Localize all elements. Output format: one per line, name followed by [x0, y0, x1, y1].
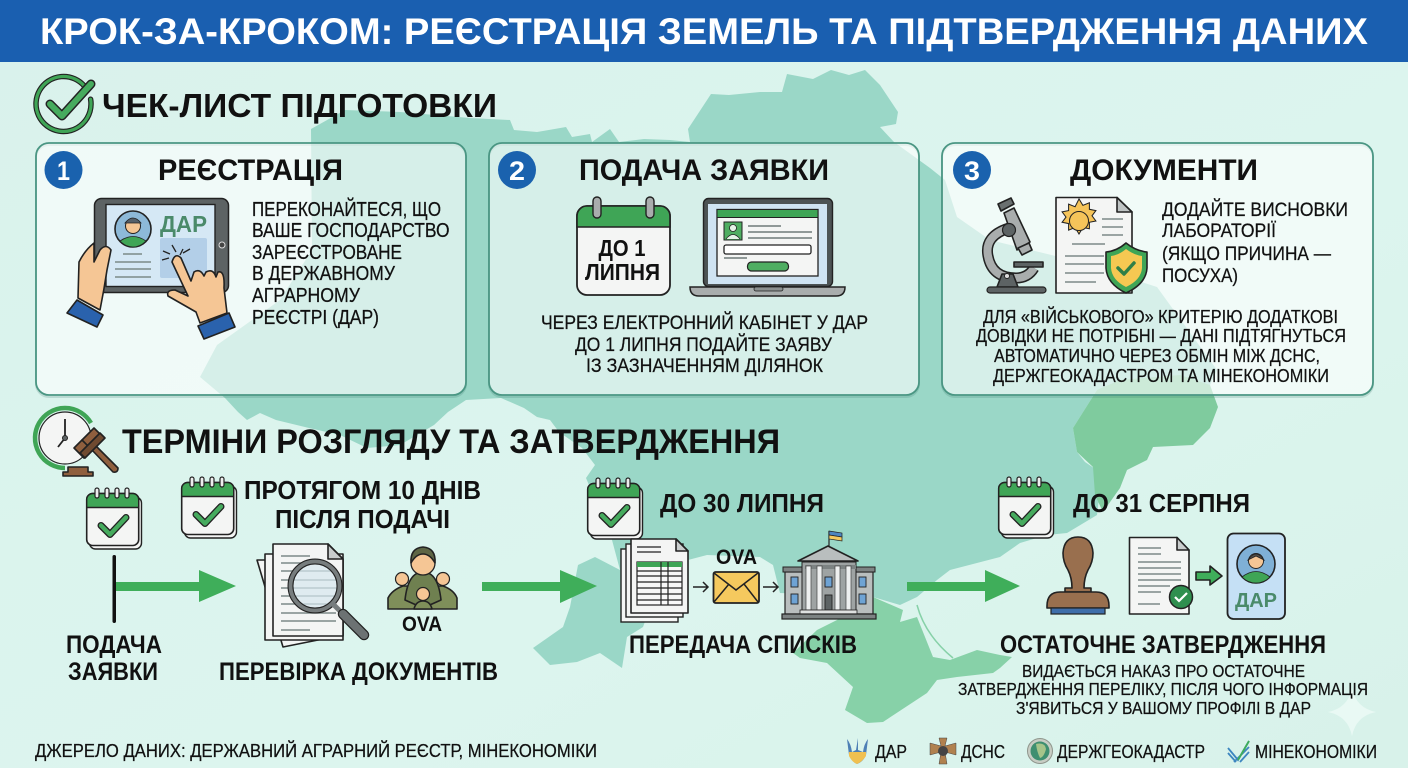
label: OVA: OVA: [402, 613, 442, 636]
icon: lab report with sun and shield: [1056, 198, 1147, 293]
text: military criterion note: ДОВІДКИ НЕ ПОТРІБНІ — ДАНІ ПІДТЯГНУТЬСЯ: [976, 326, 1346, 346]
icon: calendar until 1 July: [577, 197, 670, 295]
arrow 2: [482, 570, 597, 603]
icon: calendar: [182, 477, 236, 538]
number badge 2: 2: [509, 156, 525, 186]
text: military criterion note: ДЛЯ «ВІЙСЬКОВОГО» КРИТЕРІЮ ДОДАТКОВІ: [983, 306, 1338, 327]
icon: tablet with hands: [67, 198, 235, 339]
step: document check: [182, 475, 498, 686]
icon: microscope: [987, 198, 1046, 293]
title bar: [0, 0, 1408, 62]
icon: documents with magnifier: [257, 544, 364, 647]
icon: stamp: [1047, 537, 1109, 614]
footer: source: ДЖЕРЕЛО ДАНИХ: ДЕРЖАВНИЙ АГРАРНИЙ РЕЄСТР, МІНЕКОНОМІКИ: [35, 740, 597, 761]
icon: checklist check mark: [36, 76, 91, 131]
text: lab conclusions: ПОСУХА): [1162, 265, 1238, 287]
text: application description: ЧЕРЕЗ ЕЛЕКТРОННИЙ КАБІНЕТ У ДАР: [541, 310, 868, 334]
panel: application: [489, 143, 919, 397]
arrow 3: [907, 570, 1020, 602]
text: application description: ІЗ ЗАЗНАЧЕННЯМ ДІЛЯНОК: [586, 355, 824, 377]
step: application submission: [66, 488, 162, 686]
number badge 1: 1: [57, 156, 70, 186]
heading: review terms: ТЕРМІНИ РОЗГЛЯДУ ТА ЗАТВЕРДЖЕННЯ: [122, 423, 780, 461]
label: OVA: OVA: [716, 546, 757, 569]
label: application: ЗАЯВКИ: [68, 658, 158, 686]
footer: logo DAR: ДАР: [875, 741, 907, 762]
title bar: КРОК-ЗА-КРОКОМ: РЕЄСТРАЦІЯ ЗЕМЕЛЬ ТА ПІДТВЕРДЖЕННЯ ДАНИХ: [40, 11, 1368, 52]
icon: calendar: [588, 478, 642, 539]
icon: calendar until 1 July: ЛИПНЯ: [585, 259, 660, 285]
icon: DAR profile card: [1228, 534, 1285, 619]
icon: calendar: [87, 488, 142, 549]
date label: until 30 July: ДО 30 ЛИПНЯ: [660, 488, 824, 518]
number badge 1: [44, 151, 82, 189]
text: registration description: ЗАРЕЄСТРОВАНЕ: [252, 242, 402, 264]
text: final approval description: [958, 661, 1368, 718]
icon: government building: [782, 531, 876, 619]
text: lab conclusions: [1162, 197, 1348, 287]
heading: registration: РЕЄСТРАЦІЯ: [158, 154, 343, 187]
icon: approval document: [1130, 538, 1192, 614]
arrow: envelope to ministry: [763, 582, 778, 592]
arrow 1: [116, 570, 236, 602]
footer: logo DSNS: [930, 738, 1005, 764]
label: application: [66, 631, 162, 686]
text: final approval description: ВИДАЄТЬСЯ НАКАЗ ПРО ОСТАТОЧНЕ: [1022, 661, 1305, 681]
label: final approval: ОСТАТОЧНЕ ЗАТВЕРДЖЕННЯ: [1000, 631, 1326, 659]
icon: tablet with hands: ДАР: [160, 211, 207, 237]
text: military criterion note: АВТОМАТИЧНО ЧЕРЕЗ ОБМІН МІЖ ДСНС,: [994, 346, 1320, 366]
icon: clock and gavel: [35, 408, 118, 476]
arrow: list to envelope: [693, 582, 708, 592]
icon: spreadsheet documents: [621, 539, 688, 622]
text: lab conclusions: ЛАБОРАТОРІЇ: [1162, 220, 1277, 242]
icon: laptop with online form: [690, 198, 845, 296]
icon: OVA officials group: [388, 547, 457, 609]
number badge 3: [953, 151, 991, 189]
label: document check: ПЕРЕВІРКА ДОКУМЕНТІВ: [219, 658, 498, 686]
text: military criterion note: [976, 306, 1346, 386]
text: registration description: ВАШЕ ГОСПОДАРСТВО: [252, 220, 450, 242]
icon: envelope: [714, 572, 759, 603]
timeline start marker: [112, 555, 116, 623]
text: application description: [541, 310, 868, 377]
label: application: ПОДАЧА: [66, 631, 162, 659]
icon: calendar until 1 July: ДО 1: [598, 235, 646, 261]
text: registration description: АГРАРНОМУ: [252, 285, 360, 307]
footer: logo DSNS: ДСНС: [961, 741, 1005, 762]
number badge 3: 3: [964, 156, 980, 186]
heading: documents: ДОКУМЕНТИ: [1070, 154, 1258, 187]
panel: registration: [36, 143, 466, 397]
icon: DAR profile card: ДАР: [1235, 590, 1277, 612]
text: registration description: [252, 197, 450, 329]
footer: logo Ministry of Economy: МІНЕКОНОМІКИ: [1255, 741, 1377, 762]
text: registration description: РЕЄСТРІ (ДАР): [252, 307, 379, 329]
text: lab conclusions: (ЯКЩО ПРИЧИНА —: [1162, 243, 1331, 265]
text: registration description: ПЕРЕКОНАЙТЕСЯ, ЩО: [252, 197, 441, 221]
icon: calendar: [999, 477, 1054, 538]
number badge 2: [498, 151, 536, 189]
text: lab conclusions: ДОДАЙТЕ ВИСНОВКИ: [1162, 197, 1348, 221]
map of Ukraine background: [200, 70, 1218, 723]
arrow: document to profile: [1196, 566, 1222, 585]
sparkle decoration: [1328, 688, 1376, 736]
date label: within 10 days: [244, 475, 481, 534]
date label: until 31 August: ДО 31 СЕРПНЯ: [1073, 488, 1250, 518]
heading: checklist: ЧЕК-ЛИСТ ПІДГОТОВКИ: [102, 88, 497, 125]
text: military criterion note: ДЕРЖГЕОКАДАСТРОМ ТА МІНЕКОНОМІКИ: [993, 366, 1329, 386]
panel: documents: [942, 143, 1373, 397]
step: final approval: [958, 477, 1368, 718]
text: application description: ДО 1 ЛИПНЯ ПОДАЙТЕ ЗАЯВУ: [575, 332, 833, 356]
heading: application: ПОДАЧА ЗАЯВКИ: [579, 154, 829, 187]
footer: logo Derzhgeokadastr: [1028, 738, 1205, 764]
step: list transfer: [588, 478, 876, 659]
date label: within 10 days: ПІСЛЯ ПОДАЧІ: [275, 504, 450, 534]
text: final approval description: З'ЯВИТЬСЯ У ВАШОМУ ПРОФІЛІ В ДАР: [1016, 698, 1311, 718]
footer: logo DAR: [847, 738, 907, 764]
footer: logo Derzhgeokadastr: ДЕРЖГЕОКАДАСТР: [1057, 741, 1205, 762]
label: list transfer: ПЕРЕДАЧА СПИСКІВ: [629, 631, 857, 659]
date label: within 10 days: ПРОТЯГОМ 10 ДНІВ: [244, 475, 481, 505]
text: registration description: В ДЕРЖАВНОМУ: [252, 263, 395, 285]
